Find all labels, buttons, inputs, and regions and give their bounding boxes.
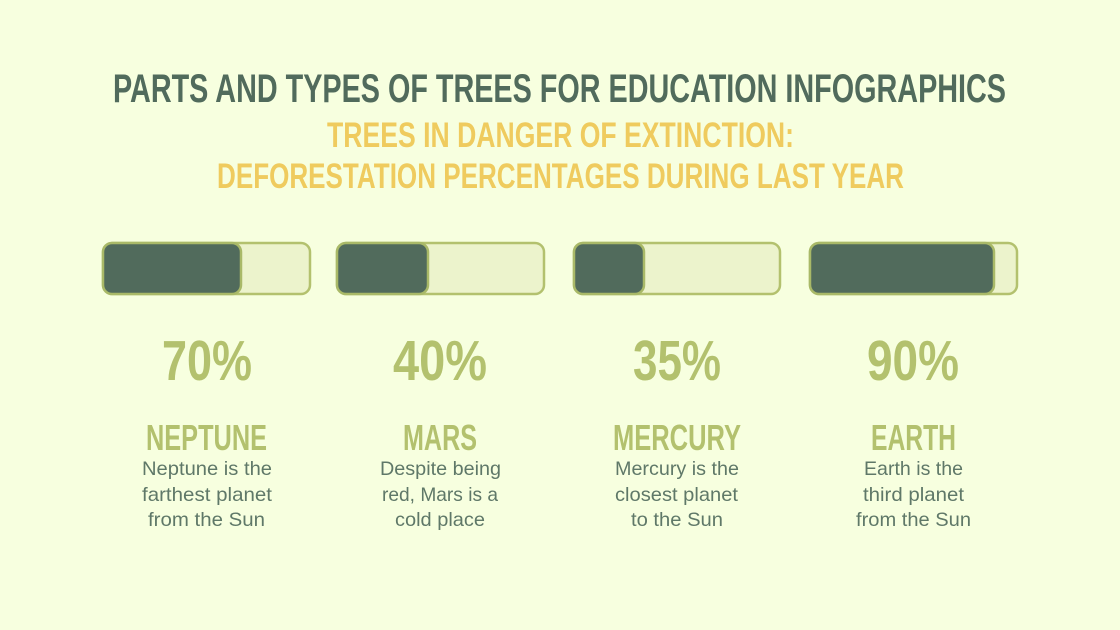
description: Mars: Despite being bbox=[380, 458, 501, 480]
description: Mercury bbox=[615, 458, 739, 531]
heading: Mars: MARS bbox=[403, 417, 477, 458]
subtitle: DEFORESTATION PERCENTAGES DURING LAST YEAR bbox=[217, 157, 904, 196]
heading: Earth: EARTH bbox=[871, 417, 956, 458]
panel: Neptune bbox=[103, 243, 310, 531]
description: Mercury: to the Sun bbox=[631, 509, 723, 531]
description: Mars: red, Mars is a bbox=[382, 484, 498, 506]
progress bar: Mercury 35% bbox=[574, 243, 780, 294]
description: Earth: third planet bbox=[863, 484, 965, 506]
description: Mercury: Mercury is the bbox=[615, 458, 739, 480]
heading: Neptune: NEPTUNE bbox=[146, 417, 267, 458]
description: Earth bbox=[856, 458, 971, 531]
progress bar: Mars 40% bbox=[337, 243, 544, 294]
percentage: 40%: 40% bbox=[393, 329, 487, 393]
description: Neptune: from the Sun bbox=[148, 509, 265, 531]
heading: Mercury: MERCURY bbox=[613, 417, 741, 458]
progress bar: Earth 90% bbox=[810, 243, 1017, 294]
description: Neptune: Neptune is the bbox=[142, 458, 272, 480]
description: Neptune: farthest planet bbox=[142, 484, 273, 506]
panel: Earth bbox=[810, 243, 1017, 531]
percentage: 35%: 35% bbox=[633, 329, 721, 393]
description: Neptune bbox=[142, 458, 273, 531]
progress bar: Neptune 70% bbox=[103, 243, 310, 294]
subtitle bbox=[217, 116, 904, 196]
subtitle: TREES IN DANGER OF EXTINCTION: bbox=[327, 116, 794, 155]
percentage: 70%: 70% bbox=[162, 329, 252, 393]
description: Earth: from the Sun bbox=[856, 509, 971, 531]
description: Mars bbox=[380, 458, 501, 531]
panel: Mercury bbox=[574, 243, 780, 531]
panel: Mars bbox=[337, 243, 544, 531]
percentage: 90%: 90% bbox=[867, 329, 959, 393]
description: Mars: cold place bbox=[395, 509, 485, 531]
description: Earth: Earth is the bbox=[864, 458, 963, 480]
description: Mercury: closest planet bbox=[615, 484, 739, 506]
